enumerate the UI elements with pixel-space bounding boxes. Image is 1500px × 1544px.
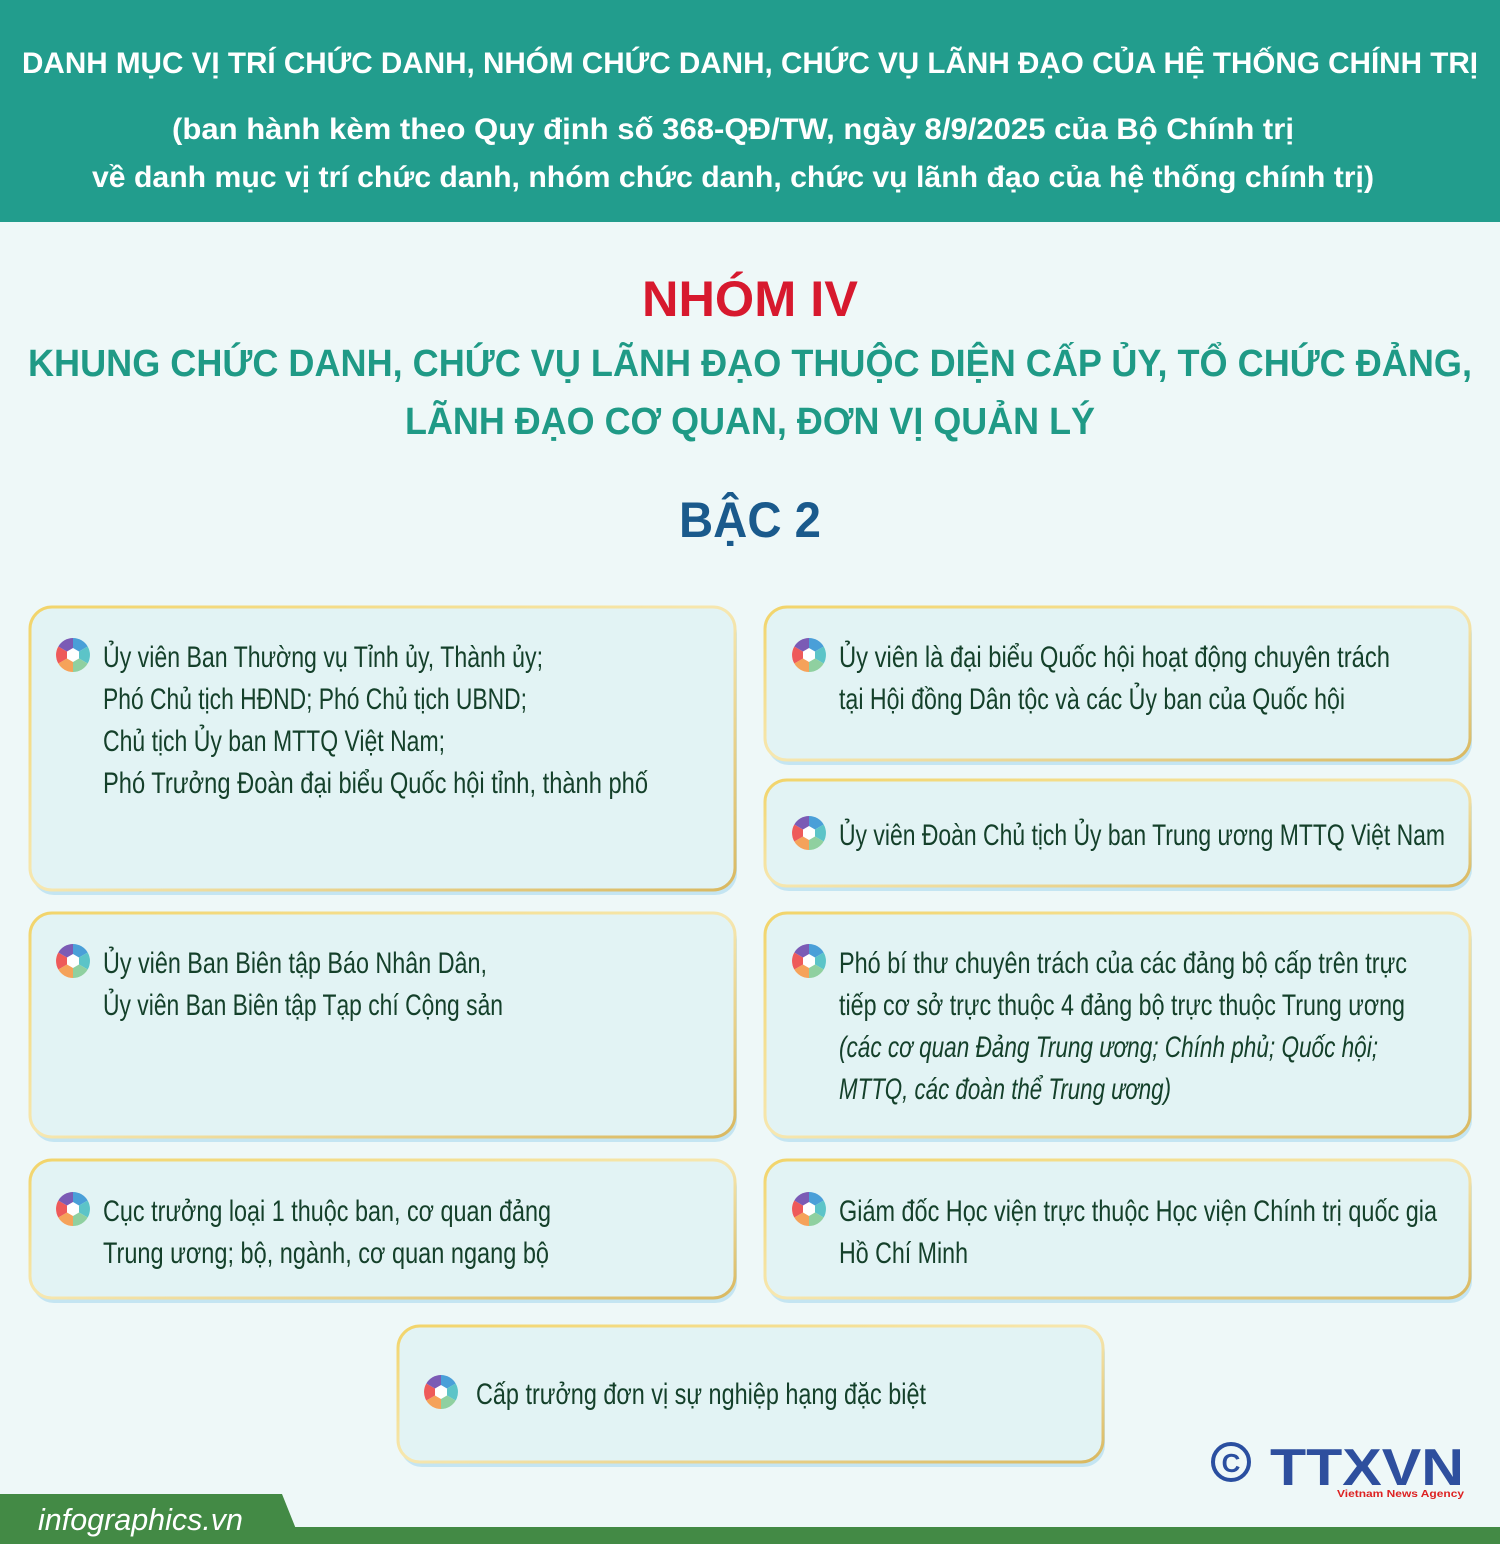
logo: TTXVN	[1213, 1439, 1465, 1500]
title: NHOM IV: NHÓM IV	[642, 271, 859, 327]
subtitle	[28, 340, 1472, 443]
panel: box right 1	[765, 607, 1472, 765]
panel: box left 3	[30, 1160, 737, 1303]
panel: box right 2	[765, 780, 1472, 891]
logo: TTXVN: Vietnam News Agency	[1337, 1489, 1465, 1500]
panel: box left 3: Cục trưởng loại 1 thuộc ban, cơ quan đảng	[103, 1195, 551, 1228]
header banner	[0, 0, 1500, 222]
logo: TTXVN: C	[1222, 1448, 1241, 1478]
heading: BAC 2: BẬC 2	[679, 492, 821, 548]
panel: box left 2	[30, 913, 737, 1142]
footer band: infographics.vn	[38, 1502, 243, 1537]
panel: box right 3	[765, 913, 1472, 1142]
header banner: (ban hành kèm theo Quy định số 368-QĐ/TW, ngày 8/9/2025 của Bộ Chính trị	[172, 113, 1294, 146]
panel: box 1: Phó Trưởng Đoàn đại biểu Quốc hội tỉnh, thành phố	[103, 767, 648, 800]
panel: box right 1: tại Hội đồng Dân tộc và các Ủy ban của Quốc hội	[839, 682, 1345, 716]
panel: box left 3: Trung ương; bộ, ngành, cơ quan ngang bộ	[103, 1237, 549, 1270]
panel: bottom box: Cấp trưởng đơn vị sự nghiệp hạng đặc biệt	[476, 1378, 927, 1411]
panel: box 1: Chủ tịch Ủy ban MTTQ Việt Nam;	[103, 724, 445, 758]
panel: box 1: Ủy viên Ban Thường vụ Tỉnh ủy, Thành ủy;	[103, 640, 543, 674]
panel: box left 2: Ủy viên Ban Biên tập Tạp chí Cộng sản	[103, 988, 503, 1022]
panel: bottom box	[398, 1326, 1105, 1467]
panel: box left 2: Ủy viên Ban Biên tập Báo Nhân Dân,	[103, 946, 487, 980]
header banner: về danh mục vị trí chức danh, nhóm chức danh, chức vụ lãnh đạo của hệ thống chính trị)	[92, 161, 1374, 194]
panel: box 1	[30, 607, 737, 895]
subtitle: LÃNH ĐẠO CƠ QUAN, ĐƠN VỊ QUẢN LÝ	[405, 399, 1095, 443]
logo: TTXVN: TTXVN	[1270, 1439, 1464, 1497]
footer band	[0, 1494, 1500, 1544]
header banner: DANH MỤC VỊ TRÍ CHỨC DANH, NHÓM CHỨC DANH, CHỨC VỤ LÃNH ĐẠO CỦA HỆ THỐNG CHÍNH TRỊ	[22, 46, 1478, 80]
panel: box 1: Phó Chủ tịch HĐND; Phó Chủ tịch UBND;	[103, 683, 527, 716]
panel: box right 4: Hồ Chí Minh	[839, 1237, 968, 1270]
panel: box right 3: MTTQ, các đoàn thể Trung ương)	[839, 1073, 1171, 1106]
panel: box right 4	[765, 1160, 1472, 1303]
